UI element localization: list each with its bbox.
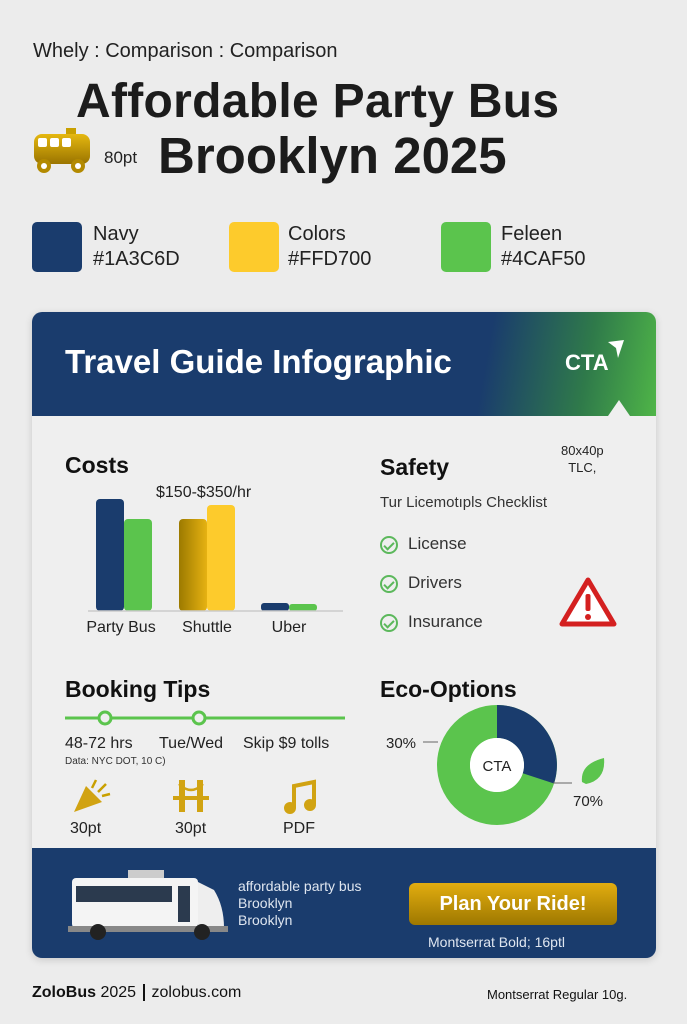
color swatches — [32, 222, 586, 272]
color swatches: Navy — [93, 223, 139, 245]
timeline — [65, 710, 345, 726]
icons row — [70, 780, 316, 837]
panel: booking tips: Booking Tips — [65, 676, 210, 702]
donut chart — [386, 705, 604, 825]
subtitle: Whely : Comparison : Comparison — [33, 40, 338, 62]
bus photo — [68, 870, 228, 940]
title — [34, 75, 559, 184]
panel: costs — [65, 452, 343, 636]
color swatches: #1A3C6D — [93, 248, 180, 270]
panel: booking tips — [65, 676, 345, 837]
bottom CTA band: Brooklyn — [238, 895, 292, 911]
icons row: PDF — [283, 820, 315, 837]
panel: safety — [380, 443, 616, 632]
color swatches: Feleen — [501, 223, 562, 245]
icons row: 30pt — [175, 820, 206, 837]
title: 80pt — [104, 148, 137, 167]
panel: eco-options — [380, 676, 604, 825]
icons row: 30pt — [70, 820, 101, 837]
checklist — [380, 534, 483, 632]
panel: safety: Safety — [380, 454, 449, 480]
icon: bus — [34, 128, 90, 173]
bar chart: Party Bus — [86, 619, 156, 636]
button: Plan Your Ride! — [439, 893, 587, 915]
footer: ZoloBus 2025 zolobus.com — [32, 984, 241, 1001]
bar chart: Uber — [272, 619, 307, 636]
checklist: License — [408, 534, 467, 553]
title: Brooklyn 2025 — [158, 127, 507, 184]
tips text — [65, 735, 329, 752]
header banner — [32, 312, 656, 416]
panel: costs: Costs — [65, 452, 129, 478]
tips text: 48-72 hrs — [65, 735, 133, 752]
bottom CTA band: Montserrat Bold; 16ptl — [428, 934, 565, 950]
bottom CTA band: Brooklyn — [238, 912, 292, 928]
checklist: Insurance — [408, 612, 483, 631]
checklist: Drivers — [408, 573, 462, 592]
donut chart: CTA — [483, 758, 511, 775]
panel: safety: TLC, — [568, 460, 596, 475]
header banner: CTA — [565, 350, 609, 375]
bar chart — [86, 499, 343, 636]
panel: costs: $150-$350/hr — [156, 484, 251, 501]
text: Montserrat Regular 10g. — [487, 987, 627, 1002]
panel: safety: 80x40p — [561, 443, 604, 458]
donut chart: 30% — [386, 735, 416, 752]
color swatches: #4CAF50 — [501, 248, 586, 270]
panel: booking tips: Data: NYC DOT, 10 C) — [65, 756, 166, 767]
donut chart: 70% — [573, 793, 603, 810]
color swatches: #FFD700 — [288, 248, 371, 270]
panel: eco-options: Eco-Options — [380, 676, 517, 702]
bar chart: Shuttle — [182, 619, 232, 636]
bottom CTA band: affordable party bus — [238, 878, 362, 894]
bottom CTA band — [32, 848, 656, 958]
header banner: Travel Guide Infographic — [65, 343, 452, 380]
tips text: Tue/Wed — [159, 735, 223, 752]
color swatches: Colors — [288, 223, 346, 245]
title: Affordable Party Bus — [76, 75, 559, 128]
icon: warning — [560, 578, 616, 626]
button — [409, 883, 617, 925]
panel: safety: Tur Licemotıpls Checklist — [380, 494, 547, 511]
tips text: Skip $9 tolls — [243, 735, 329, 752]
main card — [32, 312, 656, 958]
